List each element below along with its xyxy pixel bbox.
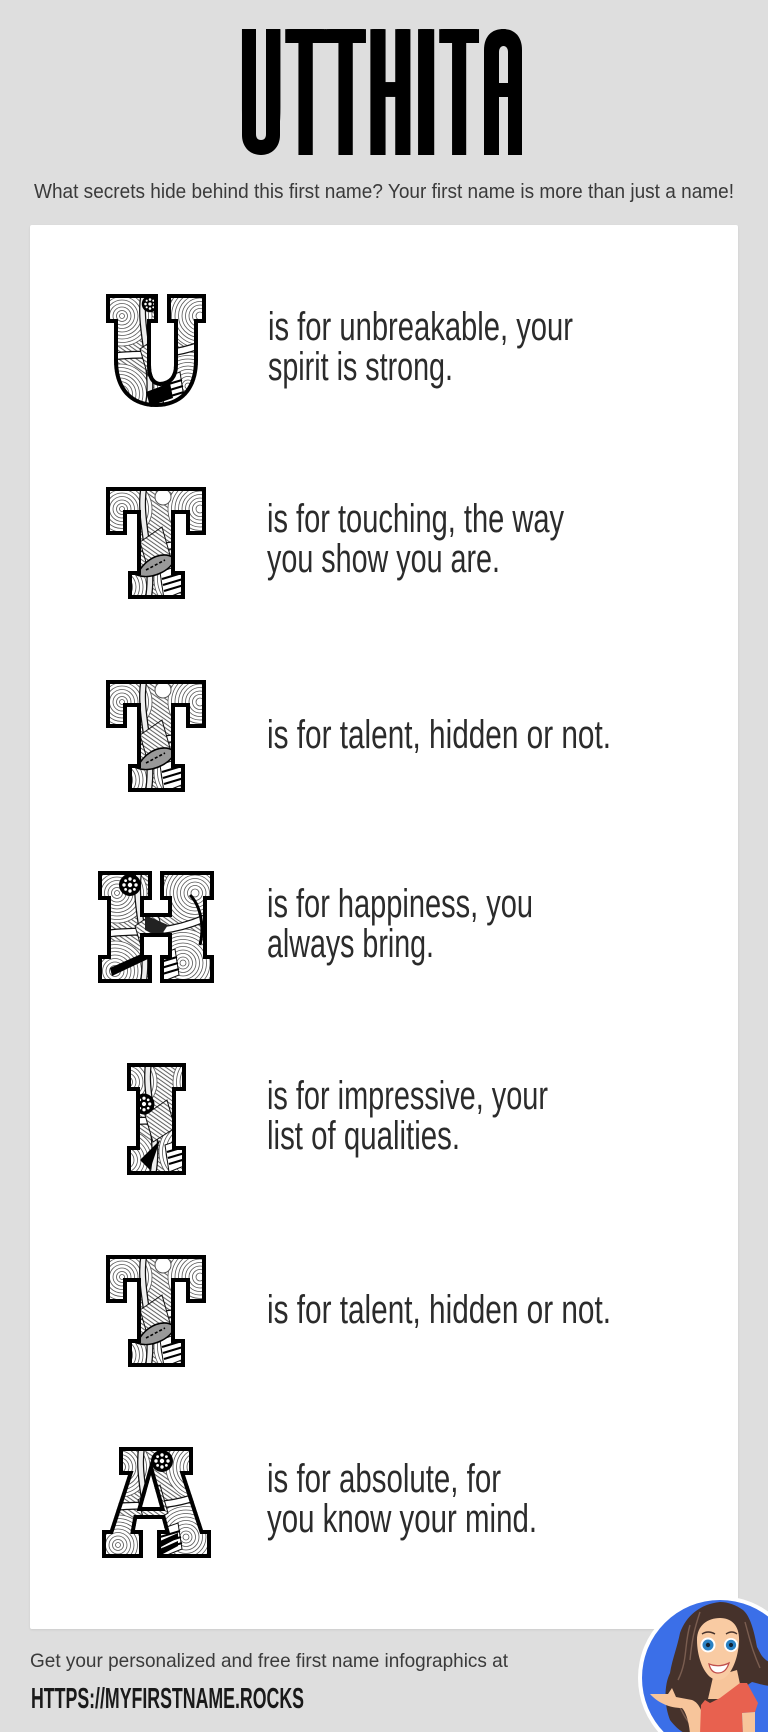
icon: mandala letter I xyxy=(127,1063,186,1175)
icon: mandala letter H xyxy=(98,871,214,983)
row 4 text xyxy=(267,882,533,966)
row 5 text: is for impressive, your xyxy=(267,1074,548,1118)
mascot brows xyxy=(702,1632,737,1634)
row 2 text xyxy=(267,497,564,581)
icon: mandala letter U xyxy=(106,294,206,407)
mascot avatar xyxy=(638,1596,768,1732)
title xyxy=(238,0,522,194)
mascot mouth xyxy=(709,1663,729,1673)
row 6: letter T xyxy=(90,1245,611,1385)
row 1: letter U xyxy=(106,294,572,407)
mascot arm and hand xyxy=(650,1688,706,1732)
row 2: letter T xyxy=(90,477,564,617)
mascot shirt xyxy=(700,1683,758,1732)
icon: mandala letter A xyxy=(102,1447,211,1558)
icon: mandala letter T xyxy=(90,1245,232,1385)
row 4 text: always bring. xyxy=(267,922,434,966)
mascot face xyxy=(697,1618,739,1680)
footer url: HTTPS://MYFIRSTNAME.ROCKS xyxy=(31,1683,304,1715)
mascot hair highlights xyxy=(676,1612,760,1726)
row 7 text: you know your mind. xyxy=(267,1497,537,1541)
mascot hair xyxy=(666,1602,768,1732)
white content panel xyxy=(30,225,738,1629)
row 6 text: is for talent, hidden or not. xyxy=(267,1288,611,1332)
row 1 text xyxy=(268,305,573,389)
subtitle: What secrets hide behind this first name? Your first name is more than just a name! xyxy=(34,180,734,203)
row 3: letter T xyxy=(90,670,611,810)
row 7: letter A xyxy=(102,1447,534,1558)
row 7 text xyxy=(267,1457,537,1541)
row 1 text: is for unbreakable, your xyxy=(268,305,573,349)
row 7 text: is for absolute, for xyxy=(267,1457,501,1501)
row 5 text xyxy=(267,1074,548,1158)
row 1 text: spirit is strong. xyxy=(268,345,453,389)
row 2 text: you show you are. xyxy=(267,537,500,581)
row 4: letter H xyxy=(98,871,532,983)
icon: mandala letter T xyxy=(90,670,232,810)
row 4 text: is for happiness, you xyxy=(267,882,533,926)
row 2 text: is for touching, the way xyxy=(267,497,564,541)
footer call to action: Get your personalized and free first name infographics at xyxy=(30,1650,509,1672)
row 5: letter I xyxy=(127,1063,548,1175)
row 3 text: is for talent, hidden or not. xyxy=(267,713,611,757)
mascot neck xyxy=(708,1670,740,1699)
mascot far arm xyxy=(742,1712,755,1732)
icon: mandala letter T xyxy=(90,477,232,617)
mascot eyes xyxy=(700,1638,738,1652)
row 5 text: list of qualities. xyxy=(267,1114,460,1158)
